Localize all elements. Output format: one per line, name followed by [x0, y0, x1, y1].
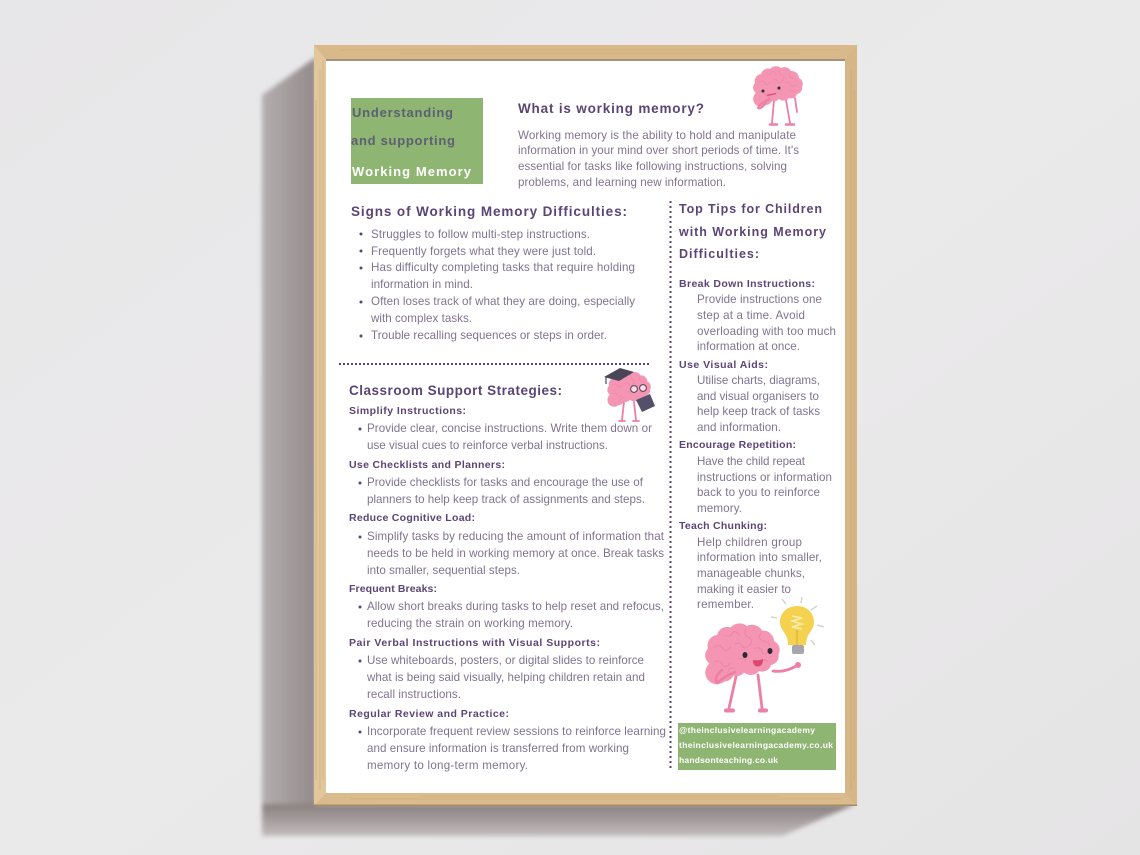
- paragraph: definition: information in your mind over short periods of time. It's: [518, 144, 799, 157]
- poster paper: [326, 61, 845, 793]
- strategy: pair verbal and visual: recall instructions.: [367, 688, 461, 701]
- tip: break down instructions: Provide instructions one: [697, 293, 822, 306]
- icon: thinking brain: [753, 66, 803, 124]
- section: classroom support strategies: [349, 383, 666, 772]
- strategy: regular review: and ensure information is transferred from working: [367, 742, 629, 755]
- strategy: regular review: Incorporate frequent review sessions to reinforce learning: [367, 725, 666, 738]
- list: signs: Trouble recalling sequences or steps in order.: [371, 329, 607, 342]
- tip: encourage repetition: [679, 439, 832, 515]
- title block: [351, 98, 483, 184]
- paragraph: definition: [518, 129, 799, 189]
- strategy: cognitive load: [349, 512, 665, 577]
- paragraph: definition: Working memory is the ability to hold and manipulate: [518, 129, 796, 142]
- heading: top tips: Difficulties:: [679, 247, 759, 261]
- tip: encourage repetition: Have the child repeat: [697, 455, 806, 468]
- wooden frame: [314, 45, 857, 806]
- heading: classroom: Classroom Support Strategies:: [349, 383, 562, 398]
- section: top tips: [678, 202, 836, 611]
- tip: break down instructions: step at a time. Avoid: [697, 309, 805, 322]
- tip: visual aids: Utilise charts, diagrams,: [697, 374, 820, 387]
- strategy: pair verbal and visual: [349, 637, 645, 701]
- list: signs: with complex tasks.: [370, 312, 472, 325]
- strategy: simplify instructions: Provide clear, concise instructions. Write them down or: [367, 422, 652, 435]
- tip: visual aids: help keep track of tasks: [697, 405, 820, 418]
- strategy: checklists: Use Checklists and Planners:: [349, 459, 505, 471]
- heading: what is working memory: What is working memory?: [518, 101, 704, 116]
- section: signs of difficulties: [351, 204, 635, 342]
- strategy: frequent breaks: reducing the strain on working memory.: [367, 617, 573, 630]
- strategy: checklists: Provide checklists for tasks and encourage the use of: [367, 476, 644, 489]
- section: what is working memory: [518, 101, 799, 189]
- tip: encourage repetition: instructions or information: [697, 471, 832, 484]
- heading: top tips: Top Tips for Children: [679, 202, 822, 216]
- tip: teach chunking: Teach Chunking:: [679, 520, 767, 532]
- strategy: checklists: planners to help keep track of assignments and steps.: [367, 493, 645, 506]
- title block: Working Memory: [352, 164, 472, 179]
- tip: teach chunking: information into smaller,: [697, 551, 822, 564]
- tip: teach chunking: manageable chunks,: [697, 567, 805, 580]
- paragraph: definition: problems, and learning new information.: [518, 176, 726, 189]
- strategy: simplify instructions: Simplify Instructions:: [349, 405, 466, 417]
- tip: teach chunking: remember.: [697, 598, 754, 611]
- strategy: cognitive load: into smaller, sequential steps.: [367, 564, 520, 577]
- heading: top tips: with Working Memory: [678, 225, 826, 239]
- tip: visual aids: [679, 359, 820, 434]
- strategy: checklists: [349, 459, 645, 506]
- tip: visual aids: and information.: [697, 421, 781, 434]
- list: signs: Often loses track of what they are doing, especially: [371, 295, 635, 308]
- list: signs: Has difficulty completing tasks that require holding: [371, 261, 635, 274]
- tip: break down instructions: Break Down Instructions:: [679, 278, 815, 290]
- heading: top tips: [678, 202, 826, 261]
- tip: teach chunking: making it easier to: [697, 583, 791, 596]
- strategy: regular review: Regular Review and Practice:: [349, 708, 509, 720]
- strategy: pair verbal and visual: what is being said visually, helping children retain and: [366, 671, 645, 684]
- icon: graduate brain: [604, 368, 655, 421]
- tip: teach chunking: Help children group: [697, 536, 802, 549]
- list: signs: Struggles to follow multi-step instructions.: [371, 228, 590, 241]
- list: signs: information in mind.: [371, 278, 473, 291]
- tip: teach chunking: [679, 520, 822, 611]
- footer contact box: @theinclusivelearningacademy: [679, 725, 815, 735]
- tip: break down instructions: [679, 278, 836, 353]
- strategy: pair verbal and visual: Pair Verbal Instructions with Visual Supports:: [349, 637, 600, 649]
- strategy: frequent breaks: [349, 583, 664, 630]
- tip: encourage repetition: back to you to reinforce: [697, 486, 820, 499]
- frame shadow: [262, 57, 856, 836]
- footer contact box: [678, 723, 836, 770]
- tip: encourage repetition: memory.: [697, 502, 742, 515]
- strategy: pair verbal and visual: Use whiteboards, posters, or digital slides to reinforce: [367, 654, 644, 667]
- strategy: simplify instructions: [349, 405, 652, 452]
- title block: Understanding: [352, 105, 453, 120]
- heading: signs: Signs of Working Memory Difficulties:: [351, 204, 627, 219]
- footer contact box: theinclusivelearningacademy.co.uk: [679, 740, 833, 750]
- tip: visual aids: and visual organisers to: [697, 390, 819, 403]
- strategy: cognitive load: Simplify tasks by reducing the amount of information that: [367, 530, 665, 543]
- list: signs: Frequently forgets what they were just told.: [371, 245, 596, 258]
- icon: brain with light bulb: [705, 597, 824, 710]
- footer contact box: handsonteaching.co.uk: [679, 755, 778, 765]
- tip: break down instructions: overloading with too much: [697, 325, 836, 338]
- tip: encourage repetition: Encourage Repetition:: [679, 439, 796, 451]
- strategy: frequent breaks: Allow short breaks during tasks to help reset and refocus,: [367, 600, 664, 613]
- strategy: regular review: memory to long-term memory.: [367, 759, 528, 772]
- strategy: frequent breaks: Frequent Breaks:: [349, 583, 437, 595]
- strategy: cognitive load: Reduce Cognitive Load:: [349, 512, 475, 524]
- tip: break down instructions: information at once.: [697, 340, 800, 353]
- tip: visual aids: Use Visual Aids:: [679, 359, 768, 371]
- strategy: cognitive load: needs to be held in working memory at once. Break tasks: [367, 547, 664, 560]
- paragraph: definition: essential for tasks like following instructions, solving: [518, 160, 787, 173]
- list: signs: [360, 228, 635, 342]
- strategy: regular review: [349, 708, 666, 772]
- title block: and supporting: [351, 133, 455, 148]
- strategy: simplify instructions: use visual cues to reinforce verbal instructions.: [367, 439, 608, 452]
- icon: light bulb: [771, 597, 824, 654]
